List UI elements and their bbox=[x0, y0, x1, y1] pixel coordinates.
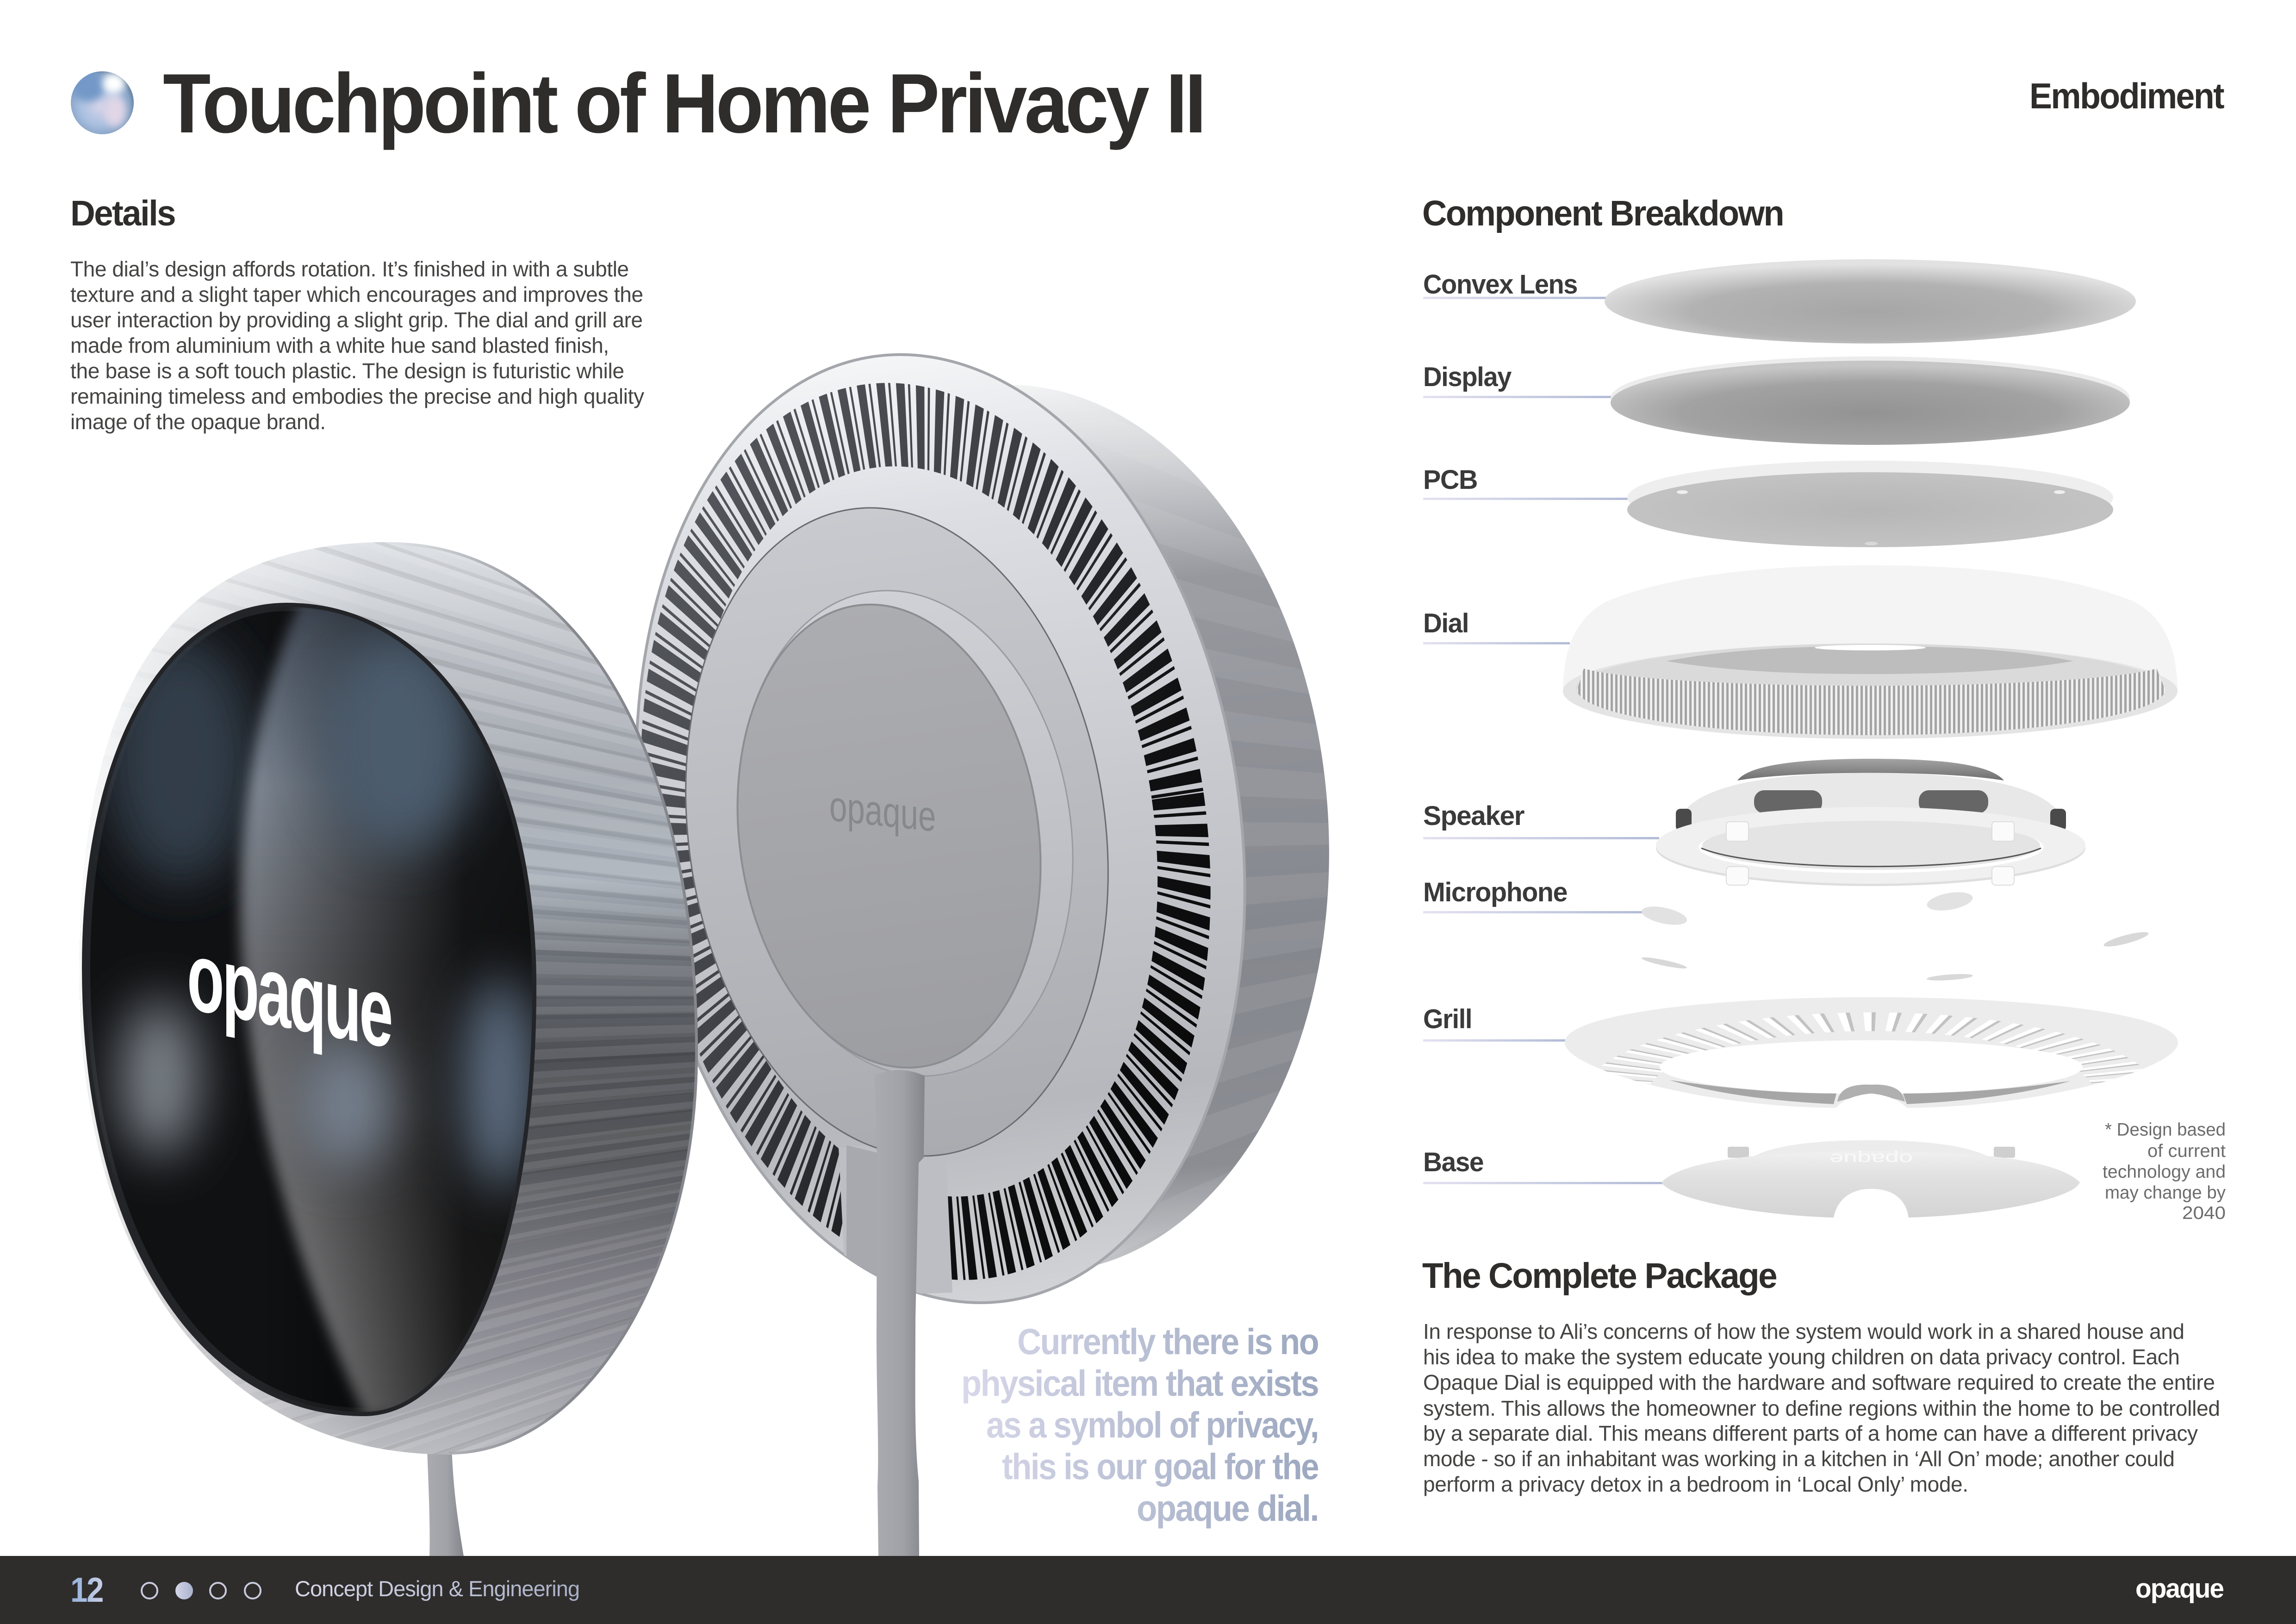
footnote: * Design based bbox=[2105, 1120, 2226, 1140]
component: dial ring bbox=[1423, 565, 2178, 739]
component: grill: Grill bbox=[1423, 1004, 1472, 1034]
quote: as a symbol of privacy, bbox=[986, 1404, 1318, 1445]
quote: physical item that exists bbox=[961, 1362, 1318, 1404]
component: base: Base bbox=[1423, 1147, 1483, 1177]
component: base bbox=[1423, 1140, 2080, 1218]
illustration: dial front view with lens bbox=[79, 542, 698, 1556]
quote bbox=[961, 1321, 1319, 1529]
text block: complete package: by a separate dial. This means different parts of a home can have a different privacy bbox=[1423, 1421, 2198, 1445]
component: grill bbox=[1423, 997, 2178, 1171]
illustration: dial back view with grill and cable bbox=[577, 315, 1358, 1556]
text block: details bbox=[70, 257, 644, 434]
footnote bbox=[2103, 1120, 2226, 1223]
heading: Component Breakdown: Component Breakdown bbox=[1422, 194, 1783, 233]
grill face bbox=[577, 315, 1304, 1343]
quote: opaque dial. bbox=[1137, 1487, 1318, 1529]
section label: Embodiment: Embodiment bbox=[2029, 75, 2225, 116]
text block: complete package: In response to Ali’s concerns of how the system would work in a shared house and bbox=[1423, 1319, 2184, 1343]
text block: details: made from aluminium with a white hue sand blasted finish, bbox=[70, 333, 609, 357]
quote: Currently there is no bbox=[1017, 1321, 1318, 1362]
component: dial ring: Dial bbox=[1423, 608, 1468, 638]
component: PCB bbox=[1423, 461, 2113, 547]
footnote: may change by bbox=[2105, 1183, 2226, 1203]
quote: this is our goal for the bbox=[1002, 1446, 1319, 1487]
page number: 12 bbox=[70, 1570, 103, 1609]
text block: complete package: mode - so if an inhabitant was working in a kitchen in ‘All On’ mode; another could bbox=[1423, 1447, 2175, 1471]
text block: complete package: system. This allows the homeowner to define regions within the home to be controlled bbox=[1423, 1396, 2220, 1420]
footer bar bbox=[0, 1556, 2296, 1624]
text block: complete package: Opaque Dial is equipped with the hardware and software required to create the entire bbox=[1423, 1370, 2215, 1394]
text block: complete package bbox=[1423, 1319, 2220, 1496]
progress dots bbox=[142, 1582, 261, 1599]
cable bbox=[875, 1070, 925, 1556]
heading: Details: Details bbox=[70, 194, 175, 233]
ventilation slots bbox=[616, 391, 1235, 1272]
footnote: 2040 bbox=[2182, 1203, 2226, 1223]
ribbed dial body bbox=[79, 542, 698, 1458]
text block: details: remaining timeless and embodies the precise and high quality bbox=[70, 384, 644, 408]
section name: Concept Design & Engineering bbox=[295, 1576, 580, 1601]
text block: details: texture and a slight taper which encourages and improves the bbox=[70, 282, 643, 306]
centre disc bbox=[709, 585, 1070, 1087]
heading: The Complete Package: The Complete Package bbox=[1422, 1256, 1777, 1296]
debossed logo: opaque bbox=[829, 782, 936, 841]
component: convex lens: Convex Lens bbox=[1423, 269, 1577, 300]
component: display: Display bbox=[1423, 362, 1512, 392]
component: convex lens bbox=[1423, 259, 2136, 344]
raised ring bbox=[707, 568, 1103, 1098]
component: PCB: PCB bbox=[1423, 465, 1477, 495]
component: speaker bbox=[1423, 759, 2085, 886]
component: display bbox=[1423, 356, 2130, 445]
white logo: opaque bbox=[187, 919, 391, 1069]
footnote: of current bbox=[2147, 1141, 2226, 1161]
footer logo: opaque bbox=[2135, 1574, 2224, 1604]
left cable bbox=[427, 1435, 464, 1556]
component: speaker: Speaker bbox=[1423, 801, 1524, 831]
component: microphones: Microphone bbox=[1423, 877, 1567, 907]
component: microphones bbox=[1423, 877, 2150, 981]
footnote: technology and bbox=[2103, 1162, 2226, 1182]
icon: pearl sphere bbox=[70, 70, 134, 134]
component: base: opaque bbox=[1829, 1150, 1913, 1168]
recessed plate bbox=[645, 480, 1149, 1184]
text block: complete package: perform a privacy detox in a bedroom in ‘Local Only’ mode. bbox=[1423, 1472, 1968, 1496]
slot gap at cable bbox=[839, 1137, 952, 1301]
black lens bbox=[86, 602, 555, 1417]
title: Touchpoint of Home Privacy II bbox=[163, 56, 1204, 150]
text block: details: the base is a soft touch plastic. The design is futuristic while bbox=[70, 359, 624, 383]
side band of back dial bbox=[1012, 385, 1329, 1265]
text block: details: The dial’s design affords rotation. It’s finished in with a subtle bbox=[70, 257, 629, 281]
text block: complete package: his idea to make the system educate young children on data privacy control. Each bbox=[1423, 1345, 2180, 1369]
text block: details: image of the opaque brand. bbox=[70, 410, 326, 434]
text block: details: user interaction by providing a slight grip. The dial and grill are bbox=[70, 308, 643, 332]
